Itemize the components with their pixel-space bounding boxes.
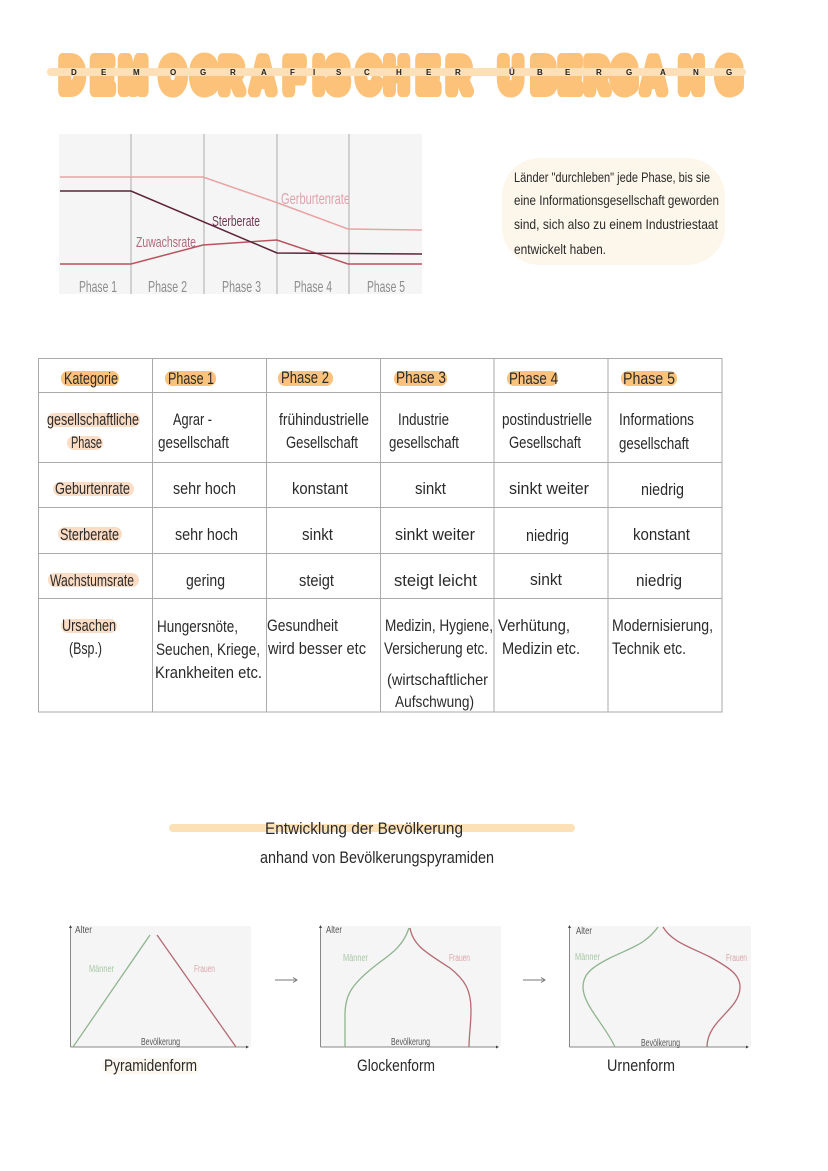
row: Ursachen: Modernisierung, <box>612 616 713 635</box>
row: Geburtenrate: konstant <box>292 479 348 498</box>
chart: Urnenform: Männer <box>575 952 600 963</box>
chart: Urnenform: Bevölkerung <box>641 1038 680 1049</box>
chart: Urnenform: Alter <box>576 926 593 937</box>
row: Sterberate <box>60 525 690 545</box>
row: Ursachen: Gesundheit <box>267 616 338 635</box>
row: Geburtenrate: Geburtenrate <box>55 479 130 498</box>
row: gesellschaftliche Phase <box>47 410 694 453</box>
line: Zuwachsrate <box>60 240 422 264</box>
row: gesellschaftliche Phase: gesellschaftliche <box>47 410 139 429</box>
table header row: Phase 5 <box>623 369 675 388</box>
row: gesellschaftliche Phase: Gesellschaft <box>509 433 581 452</box>
line: Sterberate <box>60 191 422 254</box>
phase labels <box>79 279 405 296</box>
chart: Glockenform: Bevölkerung <box>391 1037 430 1048</box>
phase labels: Phase 2 <box>148 279 187 296</box>
title <box>47 50 746 101</box>
row: gesellschaftliche Phase: gesellschaft <box>619 434 689 453</box>
section heading: anhand von Bevölkerungspyramiden <box>260 848 494 867</box>
table <box>38 358 722 712</box>
table highlights <box>47 371 677 633</box>
label: Sterberate: Sterberate <box>212 213 260 230</box>
row: Ursachen: Technik etc. <box>612 639 686 658</box>
chart: Urnenform: Frauen <box>726 953 747 964</box>
chart: Pyramidenform: Männer <box>89 964 114 975</box>
row: Ursachen: Ursachen <box>62 616 116 635</box>
arrow: Pyramide to Glocke <box>275 978 297 982</box>
chart: Glockenform: Frauen <box>449 953 470 964</box>
chart: Glockenform: Männer <box>343 953 368 964</box>
row: gesellschaftliche Phase: Agrar - <box>173 410 212 429</box>
chart: Pyramidenform: Alter <box>75 925 93 936</box>
title: large orange lettering: DEMOGRAFISCHER UBERGANG <box>60 50 742 101</box>
row: Ursachen: Medizin etc. <box>502 639 580 658</box>
row: Wachstumsrate: niedrig <box>636 571 682 590</box>
section heading <box>169 819 575 867</box>
row: Sterberate: sehr hoch <box>175 525 238 544</box>
row: Geburtenrate: sinkt <box>415 479 446 498</box>
row: gesellschaftliche Phase: Informations <box>619 410 694 429</box>
phase labels: Phase 1 <box>79 279 117 296</box>
row: Ursachen: wird besser etc <box>267 639 366 658</box>
row: Ursachen: Versicherung etc. <box>384 639 488 658</box>
table header row: Phase 1 <box>168 369 214 388</box>
row: Wachstumsrate: gering <box>186 571 225 590</box>
table header row: Phase 4 <box>509 369 558 388</box>
callout <box>502 158 725 265</box>
row: Sterberate: sinkt <box>302 525 333 544</box>
phase labels: Phase 5 <box>367 279 405 296</box>
row: Wachstumsrate: Wachstumsrate <box>50 571 134 590</box>
row: Wachstumsrate: sinkt <box>530 570 562 589</box>
callout: sind, sich also zu einem Industriestaat <box>514 216 718 232</box>
label: Zuwachsrate: Zuwachsrate <box>136 234 196 251</box>
callout: entwickelt haben. <box>514 241 606 257</box>
row: Ursachen: (wirtschaftlicher <box>387 672 489 689</box>
table header row: Phase 3 <box>396 368 446 387</box>
title: small spaced lettering: DEMOGRAFISCHER ÜBERGANG <box>71 68 732 77</box>
row: gesellschaftliche Phase: Gesellschaft <box>286 433 358 452</box>
row: Ursachen: Seuchen, Kriege, <box>156 640 260 659</box>
chart: Glockenform: Glockenform <box>357 1056 435 1075</box>
row: Sterberate: niedrig <box>526 526 569 545</box>
row: gesellschaftliche Phase: Industrie <box>398 410 449 429</box>
chart: Pyramidenform: Bevölkerung <box>141 1037 180 1048</box>
row: gesellschaftliche Phase: postindustrielle <box>502 410 592 429</box>
phase labels: Phase 4 <box>294 279 332 296</box>
chart: Urnenform: Urnenform <box>607 1056 675 1075</box>
section heading: Entwicklung der Bevölkerung <box>265 819 463 838</box>
row: Wachstumsrate: steigt <box>299 571 334 590</box>
chart: Glockenform: Alter <box>326 925 343 936</box>
row: Wachstumsrate: steigt leicht <box>394 571 477 590</box>
row: Wachstumsrate <box>50 570 682 590</box>
callout: eine Informationsgesellschaft geworden <box>514 192 719 208</box>
chart: Pyramidenform <box>69 925 251 1075</box>
row: Ursachen: Aufschwung) <box>395 694 474 711</box>
row: Ursachen: Medizin, Hygiene, <box>385 616 493 635</box>
table header row <box>64 368 675 388</box>
arrow: Glocke to Urne <box>523 978 545 982</box>
row: Ursachen: Hungersnöte, <box>157 617 238 636</box>
row: Sterberate: Sterberate <box>60 525 119 544</box>
row: Geburtenrate: sehr hoch <box>173 479 236 498</box>
row: Geburtenrate: sinkt weiter <box>509 479 589 498</box>
row: Ursachen <box>62 616 713 711</box>
chart: Pyramidenform: Pyramidenform <box>104 1056 197 1075</box>
chart: Pyramidenform: Frauen <box>194 964 215 975</box>
row: gesellschaftliche Phase: gesellschaft <box>389 433 459 452</box>
table header row: Phase 2 <box>281 368 329 387</box>
row: gesellschaftliche Phase: Phase <box>71 433 102 452</box>
row: gesellschaftliche Phase: frühindustrielle <box>279 410 369 429</box>
label: Geburtenrate: Gerburtenrate <box>281 191 350 208</box>
row: Ursachen: (Bsp.) <box>69 639 102 658</box>
chart: Urnenform <box>568 925 751 1075</box>
row: gesellschaftliche Phase: gesellschaft <box>158 433 229 452</box>
phase labels: Phase 3 <box>222 279 261 296</box>
row: Ursachen: Krankheiten etc. <box>155 663 262 682</box>
callout: Länder "durchleben" jede Phase, bis sie <box>514 169 710 185</box>
row: Geburtenrate <box>55 479 684 499</box>
table header row: Kategorie <box>64 369 118 388</box>
row: Geburtenrate: niedrig <box>641 480 684 499</box>
line chart: demographic transition <box>59 134 422 296</box>
row: Sterberate: konstant <box>633 525 690 544</box>
chart: Glockenform <box>319 925 501 1075</box>
row: Ursachen: Verhütung, <box>498 616 570 635</box>
row: Sterberate: sinkt weiter <box>395 525 475 544</box>
line: Geburtenrate <box>60 177 422 230</box>
